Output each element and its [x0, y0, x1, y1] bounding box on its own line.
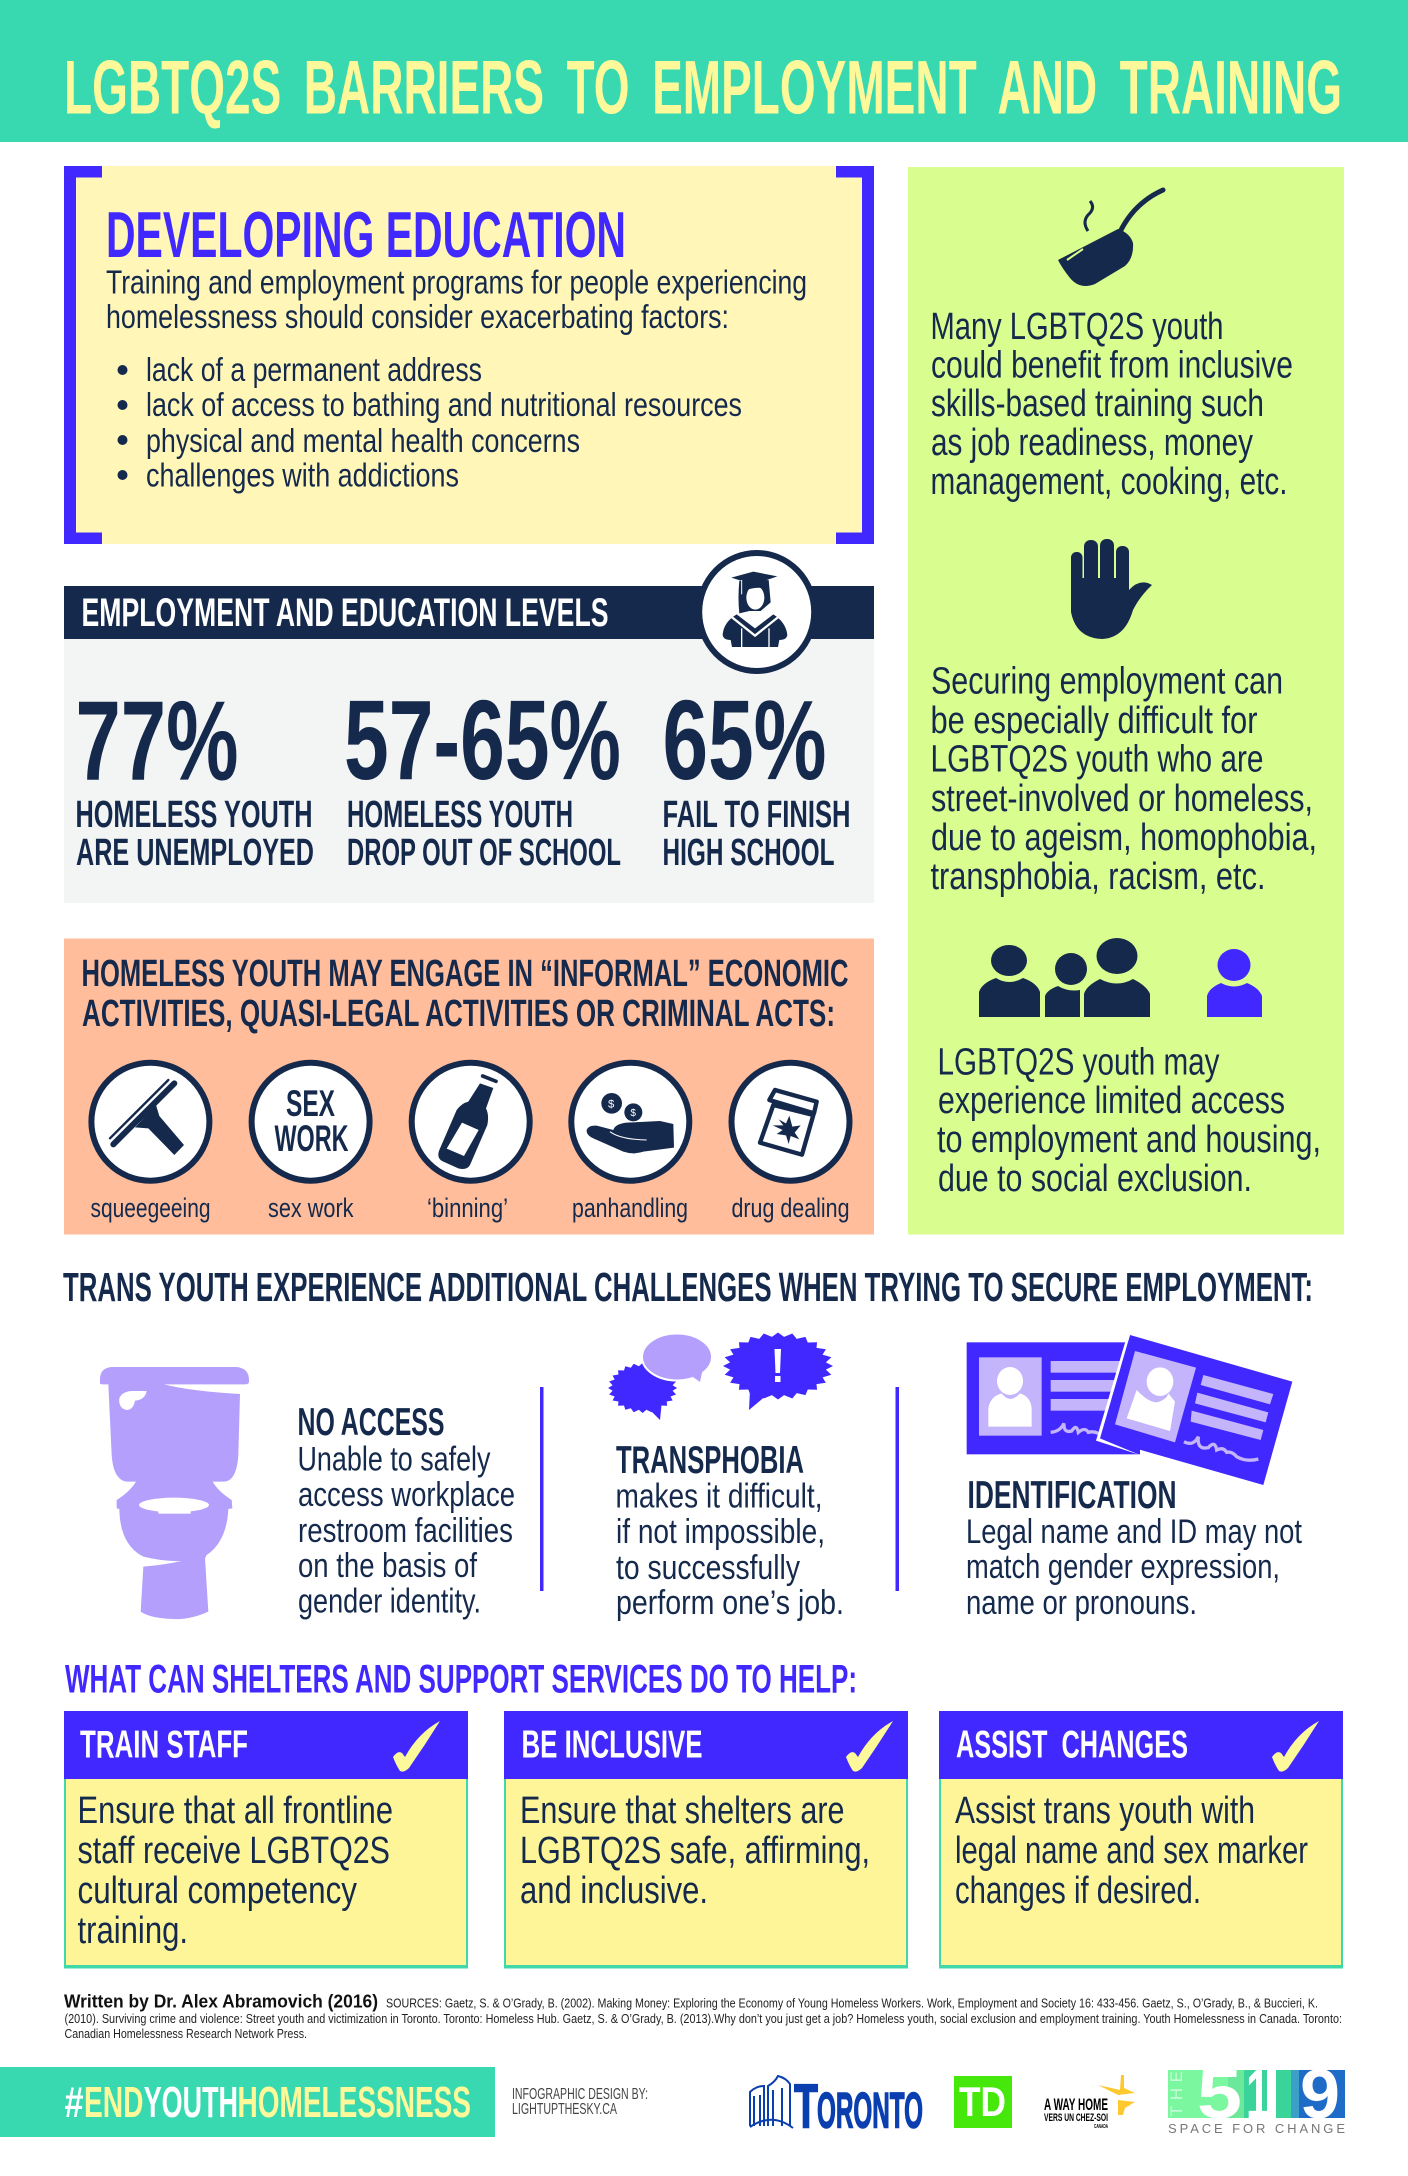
icon: panhandling hand: $ [608, 1098, 615, 1110]
icon: bottle [412, 1063, 530, 1181]
icon: frying pan [1058, 190, 1163, 286]
card: assist changes [939, 1711, 1343, 1968]
text: social exclusion: LGBTQ2S youth may [938, 1042, 1220, 1084]
bullet list: physical and mental health concerns [146, 422, 580, 459]
icon: squeegee [91, 1063, 209, 1181]
logo: The 519: 1 [1246, 2055, 1270, 2133]
card: train staff: staff receive LGBTQ2S [78, 1830, 390, 1872]
text: securing employment: LGBTQ2S youth who are [930, 739, 1264, 781]
icon: sex work [252, 1063, 370, 1181]
heading: what can shelters do: WHAT CAN SHELTERS AND SUPPORT SERVICES DO TO HELP: [65, 1658, 857, 1702]
card: be inclusive: LGBTQ2S safe, affirming, [520, 1830, 870, 1872]
logo: The 519: THE [1167, 2071, 1186, 2116]
icon: raised hand [1071, 539, 1152, 639]
stat: 77 percent: HOMELESS YOUTH [76, 794, 312, 836]
bullet list: challenges with addictions [146, 456, 459, 494]
design credit: LIGHTUPTHESKY.CA [512, 2101, 617, 2118]
icon labels: sex work [268, 1193, 354, 1223]
text: securing employment: street-involved or homeless, [931, 778, 1313, 820]
icon: speech bubbles [608, 1332, 833, 1420]
credits and sources: Canadian Homelessness Research Network Press. [64, 2026, 307, 2041]
icon labels: drug dealing [732, 1193, 850, 1223]
text: no access: restroom facilities [298, 1512, 513, 1550]
panel: employment and education levels [64, 553, 874, 903]
text: skills-based training: could benefit from inclusive [931, 345, 1293, 387]
heading: informal activities: HOMELESS YOUTH MAY ENGAGE IN “INFORMAL” ECONOMIC [82, 953, 848, 995]
heading: informal activities: ACTIVITIES, QUASI-LEGAL ACTIVITIES OR CRIMINAL ACTS: [82, 993, 835, 1035]
card: train staff: TRAIN STAFF [80, 1724, 248, 1767]
stat: 77 percent: ARE UNEMPLOYED [76, 832, 314, 874]
icon: panhandling hand [571, 1063, 689, 1181]
stat: 65 percent: 65% [662, 677, 826, 803]
stat: 57-65 percent: DROP OUT OF SCHOOL [347, 832, 621, 874]
icon labels: squeegeeing [90, 1193, 210, 1223]
icon: group of people [979, 938, 1150, 1017]
design credit: INFOGRAPHIC DESIGN BY: [512, 2086, 648, 2103]
text: transphobia: perform one’s job. [616, 1584, 844, 1622]
stat: 57-65 percent: HOMELESS YOUTH [347, 794, 573, 836]
text: transphobia: makes it difficult, [616, 1478, 822, 1516]
logo: Toronto [750, 2072, 923, 2142]
logo: The 519: 5 [1197, 2055, 1242, 2133]
intro text: homelessness should consider exacerbating factors: [106, 298, 729, 335]
heading: developing education: DEVELOPING EDUCATION [106, 198, 626, 271]
icon: ID cards [967, 1335, 1292, 1485]
icon: check mark [846, 1721, 893, 1772]
logo: Toronto: T [794, 2072, 818, 2142]
text: transphobia: if not impossible, [616, 1513, 825, 1551]
icon: toilet [100, 1367, 249, 1619]
card: be inclusive [504, 1711, 908, 1968]
text: identification: IDENTIFICATION [968, 1474, 1176, 1517]
icon: graduate [699, 553, 814, 671]
text: social exclusion [937, 1042, 1321, 1200]
intro text [106, 264, 807, 335]
card: be inclusive: Ensure that shelters are [520, 1790, 844, 1832]
icon: sex work: WORK [274, 1118, 349, 1159]
logo: TD: TD [959, 2078, 1006, 2125]
icon: check mark [393, 1721, 440, 1772]
design credit [512, 2086, 648, 2118]
credits and sources [64, 1992, 1342, 2041]
card: train staff: cultural competency [78, 1870, 357, 1912]
text: skills-based training [930, 306, 1293, 503]
card: train staff [64, 1711, 468, 1968]
hashtag banner: END [84, 2078, 144, 2127]
text: securing employment [930, 661, 1317, 898]
text: identification: match gender expression, [966, 1548, 1280, 1586]
text: social exclusion: due to social exclusion. [938, 1158, 1252, 1200]
bullet list: lack of access to bathing and nutritional resources [146, 386, 742, 423]
hashtag banner: YOUTH [144, 2078, 238, 2127]
hashtag banner: # [64, 2078, 84, 2127]
icon labels: panhandling [572, 1193, 688, 1223]
bullet list [118, 351, 742, 494]
text: skills-based training: Many LGBTQ2S youth [930, 306, 1224, 348]
stat: 77 percent: 77% [76, 678, 238, 804]
hashtag banner [0, 2067, 495, 2137]
credits and sources: Written by Dr. Alex Abramovich (2016) [64, 1992, 378, 2012]
text: skills-based training: management, cooking, etc. [930, 461, 1288, 503]
card: be inclusive: BE INCLUSIVE [522, 1724, 702, 1767]
icon: sex work: SEX [286, 1083, 335, 1124]
text: skills-based training: as job readiness, money [931, 422, 1253, 464]
panel: developing education [64, 166, 874, 544]
icon labels: ‘binning’ [427, 1193, 508, 1223]
icon: drug jar [732, 1063, 850, 1181]
text: no access: gender identity. [298, 1583, 481, 1621]
text: securing employment: due to ageism, homophobia, [931, 817, 1317, 859]
text: no access: access workplace [298, 1476, 515, 1514]
panel: informal economic activities [64, 938, 874, 1234]
text: social exclusion: to employment and housing, [937, 1119, 1321, 1161]
stat: 65 percent: FAIL TO FINISH [662, 794, 850, 836]
logo: A Way Home: VERS UN CHEZ-SOI [1044, 2112, 1108, 2124]
card: assist changes: legal name and sex marker [955, 1830, 1308, 1872]
heading: informal activities [82, 953, 848, 1035]
logo: The 519 [1167, 2055, 1345, 2136]
card: assist changes: changes if desired. [955, 1870, 1201, 1912]
stat: 65 percent: HIGH SCHOOL [662, 832, 834, 874]
logo: The 519: 9 [1300, 2055, 1340, 2133]
title banner [0, 0, 1408, 142]
text: securing employment: be especially difficult for [930, 700, 1258, 742]
bullet list: lack of a permanent address [146, 351, 482, 388]
icon: excluded person [1207, 949, 1262, 1017]
text: skills-based training: skills-based training such [931, 383, 1264, 425]
hashtag banner: HOMELESSNESS [238, 2078, 471, 2127]
heading: employment and education levels: EMPLOYMENT AND EDUCATION LEVELS [82, 591, 608, 635]
text: securing employment: Securing employment can [931, 661, 1283, 703]
text: no access [298, 1401, 515, 1621]
card: train staff: Ensure that all frontline [78, 1790, 393, 1832]
stat: 57-65 percent [344, 677, 621, 874]
icon: panhandling hand: $ [630, 1108, 636, 1119]
logo: A Way Home: CANADA [1094, 2124, 1108, 2130]
stat: 57-65 percent: 57-65% [344, 677, 621, 803]
text: transphobia: TRANSPHOBIA [616, 1439, 804, 1482]
stat: 77 percent [76, 678, 314, 874]
text: no access: on the basis of [298, 1547, 477, 1585]
panel: green sidebar [908, 167, 1344, 1234]
text: no access: Unable to safely [298, 1441, 490, 1479]
stat: 65 percent [662, 677, 850, 874]
text: transphobia [616, 1439, 844, 1622]
text: transphobia: to successfully [616, 1549, 800, 1587]
card: assist changes: ASSIST CHANGES [956, 1724, 1188, 1767]
text: identification: name or pronouns. [966, 1584, 1197, 1622]
text: social exclusion: experience limited access [938, 1080, 1285, 1122]
text: securing employment: transphobia, racism, etc. [930, 856, 1266, 898]
text: no access: NO ACCESS [298, 1401, 444, 1444]
card: train staff: training. [78, 1910, 188, 1952]
intro text: Training and employment programs for people experiencing [106, 264, 807, 300]
logo: A Way Home: A WAY HOME [1044, 2095, 1108, 2114]
text: ORONTO [817, 2082, 923, 2138]
logo: A Way Home [1044, 2075, 1135, 2130]
logo: The 519: SPACE FOR CHANGE [1168, 2121, 1345, 2136]
text: identification: Legal name and ID may not [966, 1513, 1302, 1551]
icon labels [90, 1193, 850, 1223]
card: be inclusive: and inclusive. [520, 1870, 708, 1912]
text: identification [966, 1474, 1302, 1622]
icon: check mark [1272, 1721, 1319, 1772]
card: assist changes: Assist trans youth with [955, 1790, 1255, 1832]
